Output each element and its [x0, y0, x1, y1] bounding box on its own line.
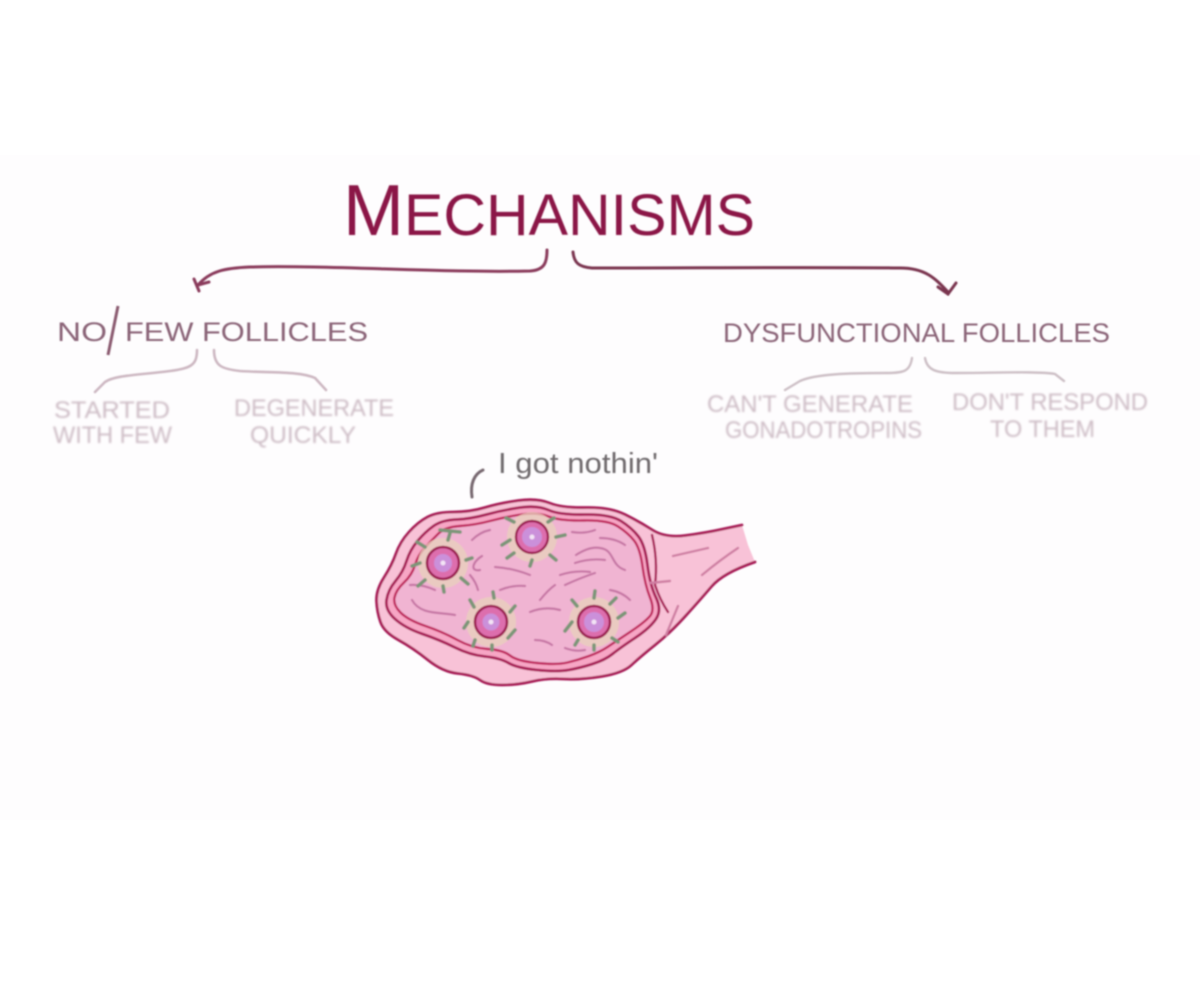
text: don't respond to them: DON'T RESPOND — [952, 389, 1148, 416]
heading: no or few follicles: NO — [57, 317, 107, 347]
text: degenerate quickly — [234, 395, 394, 449]
text: degenerate quickly: QUICKLY — [250, 422, 356, 449]
text: don't respond to them — [952, 389, 1148, 443]
text: degenerate quickly: DEGENERATE — [234, 395, 394, 422]
text: don't respond to them: TO THEM — [990, 416, 1095, 443]
branches: no or few follicles — [95, 350, 326, 392]
text: can't generate gonadotropins: GONADOTROPINS — [725, 417, 922, 444]
text: can't generate gonadotropins — [707, 391, 922, 444]
ovary medulla — [394, 514, 652, 664]
stroma wavy lines — [410, 530, 630, 651]
heading: no or few follicles — [57, 306, 368, 355]
title: MECHANISMS — [343, 171, 755, 251]
ovary illustration — [376, 500, 755, 685]
text: can't generate gonadotropins: CAN'T GENERATE — [707, 391, 913, 418]
follicle: lower left — [464, 592, 516, 650]
heading: no or few follicles: FEW FOLLICLES — [125, 317, 368, 347]
arrow: to no or few follicles — [194, 250, 547, 291]
arrow: to dysfunctional follicles — [573, 252, 956, 294]
follicle: top — [502, 512, 565, 566]
stalk band — [652, 535, 668, 612]
speech label: I got nothin' — [498, 448, 658, 480]
text: started with few: STARTED — [54, 397, 170, 424]
follicle: lower right — [565, 591, 625, 650]
ovary cortex band — [386, 507, 659, 671]
text: started with few: WITH FEW — [53, 422, 172, 449]
heading: dysfunctional follicles: DYSFUNCTIONAL FOLLICLES — [723, 318, 1110, 348]
follicle: upper left — [412, 530, 472, 592]
branches: dysfunctional follicles — [785, 358, 1064, 390]
text: started with few — [53, 397, 172, 449]
ovary outer body and stalk — [376, 500, 755, 685]
speech label — [471, 448, 658, 497]
